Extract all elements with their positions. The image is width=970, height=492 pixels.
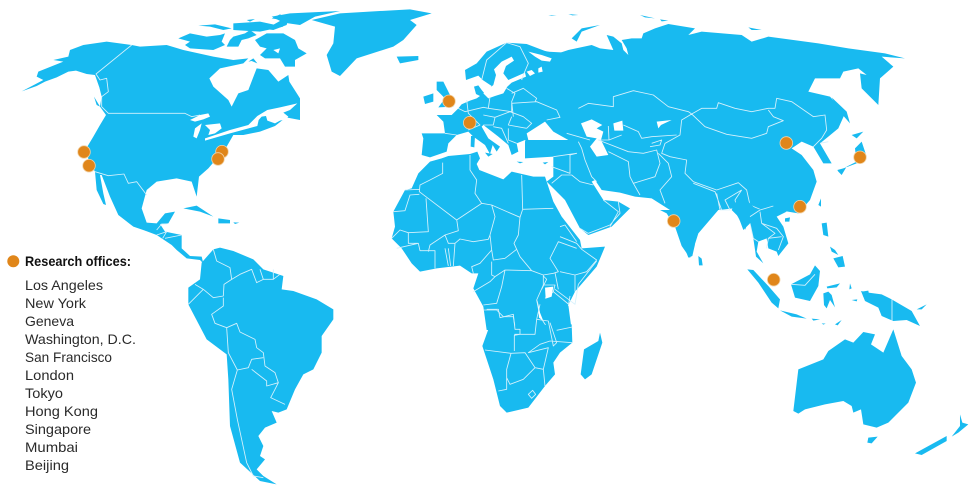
office list: Washington, D.C. [25,331,136,347]
Southeast Asia [732,193,869,308]
office list: Geneva [25,313,74,329]
Indonesia, Australia, New Zealand, Sri Lanka [683,244,968,455]
legend heading: Research offices: [25,253,131,269]
Baltic, North Sea and White Sea [460,52,552,105]
legend [7,253,136,473]
North America [22,11,340,231]
Arctic islands [178,14,307,67]
office marker: Singapore [767,273,780,286]
office list: Singapore [25,421,91,437]
Madagascar [581,333,602,379]
office list: Hong Kong [25,403,98,419]
office marker: Tokyo [854,151,866,164]
office marker: Hong Kong [794,200,806,213]
legend dot [7,255,19,267]
office marker: Mumbai [667,215,680,227]
Great Lakes and Gulf of St Lawrence [190,103,297,141]
Africa [392,152,605,413]
office marker: Los Angeles [83,159,95,172]
Greenland and Iceland [312,9,432,76]
inland seas [527,119,672,157]
office list: Tokyo [25,385,63,401]
office marker: New York [216,145,228,158]
Europe land [422,43,580,164]
Europe borders [445,43,560,143]
office list: Mumbai [25,439,78,455]
Asia borders and islands [548,14,867,233]
office marker: Washington, D.C. [212,153,224,165]
office marker: Beijing [780,137,793,149]
office list [25,277,136,473]
Eurasia [422,14,905,258]
office list: Los Angeles [25,277,103,293]
office list: Beijing [25,457,69,473]
office marker: San Francisco [78,146,90,158]
office list: New York [25,295,87,311]
office list: London [25,367,74,383]
Asia land [518,24,905,258]
Central America [145,224,203,263]
office list: San Francisco [25,349,112,365]
office marker: Geneva [463,116,476,129]
office marker: London [443,95,455,108]
South America [188,248,333,484]
